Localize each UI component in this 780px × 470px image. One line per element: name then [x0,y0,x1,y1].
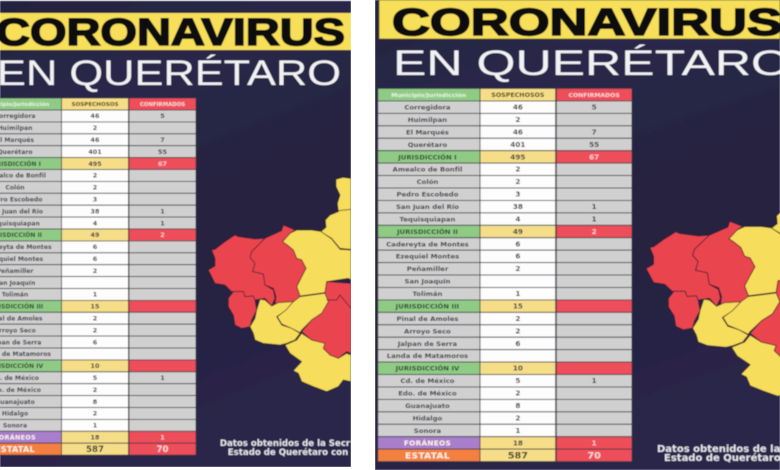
row: Peñamiller: 2 [515,265,521,273]
row: El Marqués: 46 [513,129,523,136]
row: El Marqués: 46 [91,136,100,144]
row: Jurisdicción II: 2 [160,231,165,239]
row: Tequisquiapan [378,213,632,225]
row: Corregidora: 46 [513,104,523,111]
row: Pedro Escobedo [0,193,196,205]
row: Guanajuato [0,396,196,408]
row: Tequisquiapan: 1 [160,219,165,227]
row: Pedro Escobedo [378,188,632,200]
row: Jurisdicción II [378,225,632,238]
row: Corregidora [0,110,196,122]
row: Edo. de México [0,384,196,396]
row: El Marqués: 7 [592,129,597,136]
row: Pinal de Amoles: 2 [93,314,97,322]
row: Peñamiller: 2 [93,267,97,275]
row: Jurisdicción IV [378,362,632,375]
panel: right copy of the poster [375,0,780,470]
row: Querétaro: 55 [158,148,167,156]
source note: Datos obtenidos de la Secr [220,439,351,449]
subtitle: EN QUERÉTARO [0,54,341,93]
row: Estatal total: 587 [508,451,528,461]
table header [378,88,632,101]
row: Jurisdicción II: 49 [513,228,523,236]
table header: CONFIRMADOS [140,102,185,108]
row: San Juan del Río: 38 [513,203,523,211]
row: Peñamiller [378,263,632,275]
row: Pedro Escobedo: 3 [93,196,97,204]
row: Estatal total: ESTATAL [405,452,450,461]
map of Querétaro [208,177,351,392]
row: Sonora: 1 [93,422,97,430]
row: San Joaquín [0,277,196,288]
row: Tolimán: Tolimán [2,291,28,299]
row: Sonora: Sonora [414,427,441,435]
title banner [379,0,780,44]
row: Corregidora: Corregidora [404,104,451,111]
row: Querétaro [378,138,632,151]
row: San Juan del Río: 1 [160,207,165,215]
row: Guanajuato: Guanajuato [405,402,450,410]
row: Jurisdicción IV: JURISDICCIÓN IV [395,364,460,373]
row: Sonora [378,424,632,437]
row: Edo. de México: Edo. de México [398,390,457,397]
row: Jalpan de Serra: 6 [515,340,521,348]
row: Jurisdicción III [0,300,196,312]
row: Jurisdicción I [378,151,632,163]
row: Arroyo Seco: Arroyo Seco [404,328,451,335]
row: Jurisdicción II: 2 [592,228,597,236]
row: El Marqués [0,134,196,146]
row: Foráneos: 1 [160,433,165,441]
row: Edo. de México [378,387,632,399]
row: Tequisquiapan: Tequisquiapan [399,216,456,223]
row: Tequisquiapan [0,217,196,229]
row: Jurisdicción I: 495 [88,160,102,168]
row: Querétaro: 401 [88,148,102,156]
row: Amealco de Bonfil [378,163,632,176]
row: Jalpan de Serra: 6 [93,338,98,346]
table header [0,98,196,110]
row: Tolimán [378,287,632,300]
row: Ezequiel Montes: 6 [515,253,521,261]
row: Pinal de Amoles [0,312,196,324]
row: Tolimán [0,288,196,300]
row: Jurisdicción III: 15 [513,303,523,310]
row: Querétaro: 55 [589,141,599,149]
row: Pedro Escobedo: Pedro Escobedo [396,191,459,198]
row: Foráneos: FORÁNEOS [404,439,451,447]
row: Jurisdicción I [0,158,196,170]
table header: SOSPECHOSOS [71,102,119,108]
row: San Juan del Río: San Juan del Río [396,203,459,211]
table header: Municipio/Jurisdicción [391,92,466,99]
row: Estatal total: 70 [157,445,168,455]
row: Tolimán: 1 [515,290,521,298]
row: El Marqués: El Marqués [406,129,449,136]
panel: left copy of the poster [0,1,351,467]
row: San Joaquín [378,275,632,287]
row: Foráneos [378,437,632,449]
row: Pinal de Amoles: 2 [515,315,521,323]
row: Querétaro [0,146,196,158]
row: Foráneos: 18 [91,433,100,441]
row: Hidalgo [378,412,632,424]
source note: Datos obtenidos de la [657,444,780,455]
row: Cd. de México: 5 [93,374,97,382]
row: San Juan del Río: 38 [91,207,100,215]
row: Edo. de México: 2 [93,386,97,394]
row: Ezequiel Montes: 6 [93,255,98,263]
row: Sonora [0,419,196,431]
table header: CONFIRMADOS [569,93,620,99]
row: El Marqués: 7 [160,136,165,144]
row: Cd. de México: Cd. de México [400,377,455,385]
row: Ezequiel Montes [0,253,196,265]
row: Estatal total [0,443,196,455]
row: Jurisdicción I: JURISDICCIÓN I [397,153,457,161]
row: Guanajuato: 8 [515,402,521,410]
row: Cadereyta de Montes: 6 [515,241,521,248]
row: Amealco de Bonfil: 2 [93,172,97,180]
row: Tequisquiapan: 1 [592,216,597,223]
row: Querétaro: Querétaro [408,141,448,149]
row: Amealco de Bonfil [0,170,196,181]
row: Landa de Matamoros [378,350,632,362]
source note: Estado de Querétaro con [228,447,348,458]
row: Jurisdicción IV: 10 [513,365,523,373]
row: Tolimán: Tolimán [412,290,443,298]
row: Estatal total: 70 [587,451,601,461]
subtitle: EN QUERÉTARO [393,44,780,83]
row: Colón [378,176,632,188]
row: Jurisdicción III: 15 [91,303,99,311]
row: Querétaro: 401 [510,141,526,149]
table header: SOSPECHOSOS [491,92,544,99]
row: Pedro Escobedo: 3 [515,191,521,198]
row: Landa de Matamoros: Landa de Matamoros [387,352,468,360]
row: Sonora: 1 [515,427,521,435]
row: Cadereyta de Montes: 6 [93,243,98,251]
row: Corregidora [378,101,632,113]
row: Arroyo Seco: 2 [93,326,97,334]
row: Jurisdicción III: JURISDICCIÓN III [395,302,459,310]
row: Guanajuato: 8 [93,398,98,406]
row: Colón: 2 [93,184,97,192]
source note [220,439,351,458]
row: Cadereyta de Montes [378,238,632,250]
row: Corregidora: 5 [160,112,165,120]
row: Peñamiller: Peñamiller [407,265,449,273]
row: San Joaquín: San Joaquín [405,278,451,286]
row: Estatal total [378,449,632,462]
row: Arroyo Seco [378,325,632,337]
row: Corregidora: 5 [592,104,597,111]
row: Hidalgo: Hidalgo [2,411,28,418]
row: Cd. de México: 5 [515,377,521,385]
row: Jalpan de Serra: Jalpan de Serra [397,340,457,348]
row: Huimilpan: 2 [515,116,521,124]
row: Cd. de México: 1 [160,374,165,382]
row: Ezequiel Montes [378,250,632,263]
row: Tequisquiapan: 4 [93,219,98,227]
row: Pinal de Amoles: Pinal de Amoles [396,315,459,323]
source note: Estado de Querétaro [664,452,780,464]
row: Huimilpan: 2 [93,124,97,132]
row: Tequisquiapan: 4 [515,216,521,223]
row: Amealco de Bonfil: 2 [515,166,521,174]
row: San Juan del Río: 1 [592,203,597,211]
row: Jurisdicción II [0,229,196,241]
row: Ezequiel Montes: Ezequiel Montes [396,253,459,261]
row: Foráneos: 1 [592,440,597,447]
row: Huimilpan [0,122,196,134]
row: Estatal total: 587 [86,445,104,455]
row: Jurisdicción IV [0,360,196,372]
map of Querétaro [646,171,780,396]
row: El Marqués [378,126,632,138]
row: Hidalgo: Hidalgo [413,415,443,422]
row: Amealco de Bonfil: Amealco de Bonfil [392,166,462,174]
row: Cadereyta de Montes: Cadereyta de Montes [386,241,469,248]
row: Arroyo Seco [0,324,196,336]
row: Colón: 2 [515,178,521,186]
title banner: CORONAVIRUS [0,12,345,54]
row: Huimilpan [378,113,632,126]
row: San Juan del Río [378,200,632,213]
row: Cadereyta de Montes [0,241,196,253]
row: Edo. de México: 2 [515,390,521,397]
row: Hidalgo: 2 [93,410,97,418]
row: Jurisdicción IV: 10 [91,362,100,370]
row: Foráneos [0,431,196,443]
row: Guanajuato [378,399,632,412]
row: Jalpan de Serra [0,336,196,348]
row: Colón: Colón [417,178,439,186]
row: Colón: Colón [5,184,25,192]
row: Pinal de Amoles [378,312,632,325]
row: Cd. de México [0,372,196,384]
row: Arroyo Seco: 2 [515,328,521,335]
row: Jurisdicción II: JURISDICCIÓN II [396,227,458,236]
row: Peñamiller [0,265,196,277]
row: San Juan del Río [0,205,196,217]
table: cases by municipality [378,88,632,462]
row: Jurisdicción III [378,300,632,312]
row: Corregidora: 46 [91,112,100,120]
row: Hidalgo: 2 [515,415,521,422]
row: Cd. de México [378,375,632,387]
row: Jurisdicción I: 67 [589,153,599,161]
row: Jurisdicción I: 495 [510,153,526,161]
table: cases by municipality [0,98,196,455]
row: Landa de Matamoros [0,348,196,360]
title banner: CORONAVIRUS [392,2,780,44]
row: Hidalgo [0,408,196,419]
row: Jalpan de Serra [378,337,632,350]
row: Tolimán: 1 [93,291,97,299]
source note [657,444,780,464]
row: Colón [0,181,196,193]
row: Cd. de México: 1 [592,377,597,385]
row: Foráneos: 18 [513,440,523,447]
row: Jurisdicción I: 67 [158,160,167,168]
row: Jurisdicción II: 49 [91,231,100,239]
row: Huimilpan: Huimilpan [408,116,447,124]
row: Sonora: Sonora [3,423,27,430]
